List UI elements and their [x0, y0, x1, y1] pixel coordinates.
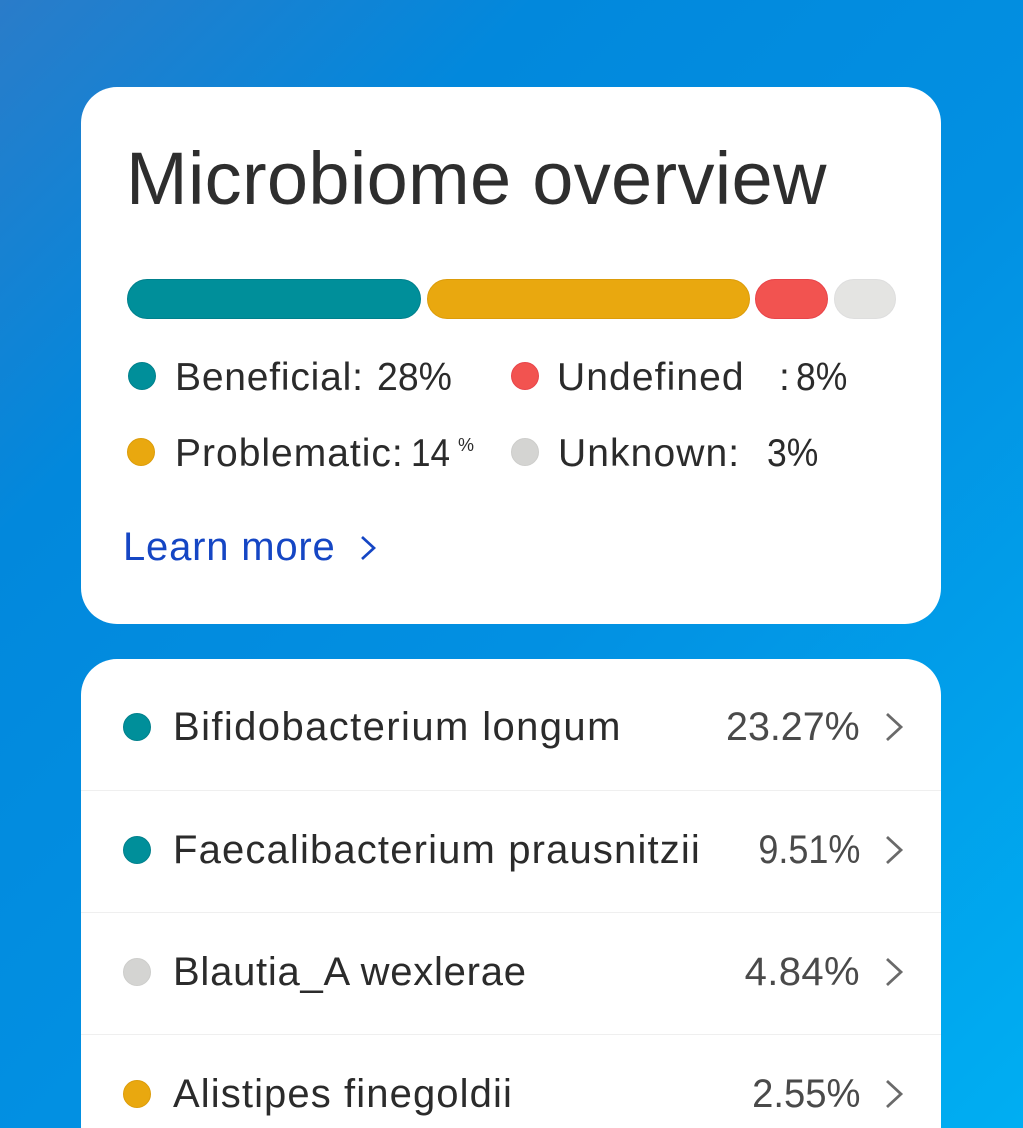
- list row: Blautia_A wexlerae: Blautia_A wexlerae: [173, 950, 527, 994]
- legend: undefined: 8%: [796, 356, 847, 399]
- title: Microbiome overview: [126, 137, 827, 220]
- legend: problematic: %: [458, 435, 474, 455]
- list row: Blautia_A wexlerae: [123, 950, 903, 994]
- legend: unknown: [511, 432, 818, 475]
- list row: Faecalibacterium prausnitzii: Faecalibacterium prausnitzii: [173, 828, 701, 872]
- legend: problematic: Problematic:: [175, 432, 404, 475]
- link: learn more: Learn more: [123, 525, 336, 569]
- legend: problematic: 14: [411, 432, 450, 475]
- list row: Faecalibacterium prausnitzii: 9.51%: [758, 828, 860, 872]
- list row: Bifidobacterium longum: Bifidobacterium longum: [173, 705, 622, 749]
- panel: overview card: [81, 87, 941, 624]
- list row: Bifidobacterium longum: [123, 705, 903, 749]
- list row: Blautia_A wexlerae: 4.84%: [745, 950, 860, 994]
- legend: beneficial: Beneficial:: [175, 356, 364, 399]
- list row: Bifidobacterium longum: 23.27%: [726, 705, 860, 749]
- legend: undefined: :: [779, 356, 790, 399]
- list row: Alistipes finegoldii: 2.55%: [752, 1072, 860, 1116]
- icon: link chevron: [361, 536, 376, 560]
- list row: Alistipes finegoldii: [123, 1072, 903, 1116]
- stacked composition bar: [127, 279, 896, 319]
- panel: species list card: [81, 659, 941, 1128]
- list row: Alistipes finegoldii: Alistipes finegoldii: [173, 1072, 513, 1116]
- legend: undefined: [511, 356, 847, 399]
- legend: unknown: 3%: [767, 432, 818, 475]
- legend: undefined: Undefined: [557, 356, 745, 399]
- legend: beneficial: 28%: [377, 356, 452, 399]
- legend: problematic: [127, 432, 474, 475]
- list row: Faecalibacterium prausnitzii: [123, 828, 903, 872]
- legend: unknown: Unknown:: [558, 432, 740, 475]
- legend: beneficial: [128, 356, 452, 399]
